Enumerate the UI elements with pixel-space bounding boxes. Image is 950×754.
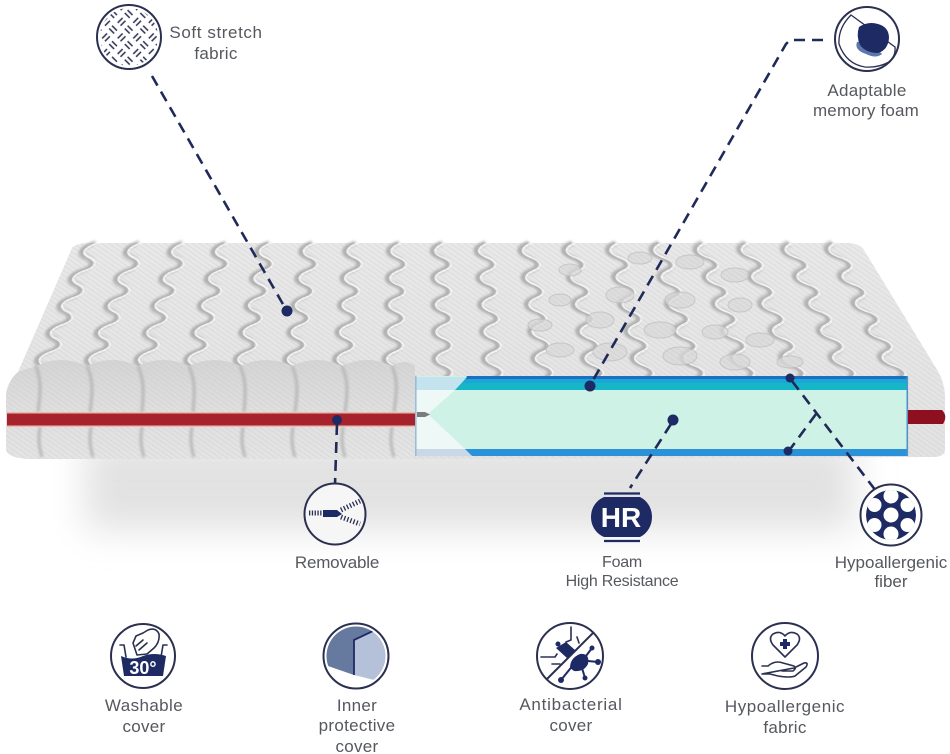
zipper slider xyxy=(417,412,430,417)
label: inner protective cover: Inner xyxy=(337,696,377,715)
label: foam high resistance: High Resistance xyxy=(566,573,679,590)
red zipper band xyxy=(7,412,417,427)
icon: washable 30 degrees: 30° xyxy=(129,658,157,678)
fabric texture xyxy=(6,243,945,459)
icon: HR foam: HR xyxy=(601,502,641,533)
memory foam bumps xyxy=(528,252,803,370)
faded left end xyxy=(415,390,465,449)
icon: hypoallergenic hand and heart xyxy=(752,623,818,689)
red zipper right end xyxy=(908,410,945,424)
label: soft stretch fabric: Soft stretch xyxy=(169,23,263,42)
leader: HR foam xyxy=(630,414,678,488)
icon: fiber xyxy=(860,484,922,546)
label: washable cover: cover xyxy=(122,717,166,736)
quilted seams xyxy=(29,243,908,378)
memory foam layer xyxy=(455,377,908,390)
label: hypoallergenic fiber: Hypoallergenic xyxy=(835,553,948,572)
label: washable cover: Washable xyxy=(105,696,183,715)
high resistance foam core xyxy=(415,376,908,456)
mattress top surface xyxy=(6,243,945,459)
label: adaptable memory foam: Adaptable xyxy=(827,81,907,100)
leader: memory foam xyxy=(584,40,823,392)
mattress front side xyxy=(6,360,415,459)
label: foam high resistance: Foam xyxy=(602,554,642,571)
label: soft stretch fabric: fabric xyxy=(194,44,238,63)
icon: washable 30 degrees xyxy=(111,624,175,688)
hypoallergenic fiber layer xyxy=(464,449,908,456)
front panel seams xyxy=(36,366,396,457)
floor shadow xyxy=(85,440,855,530)
label: hypoallergenic fiber: fiber xyxy=(874,572,908,591)
icon: HR foam xyxy=(591,494,652,541)
mattress xyxy=(6,243,945,459)
icon: memory foam hand xyxy=(835,7,899,71)
icon: inner protective cover xyxy=(320,620,390,688)
label: hypoallergenic fabric: Hypoallergenic xyxy=(725,697,845,716)
label: adaptable memory foam: memory foam xyxy=(813,101,919,120)
label: inner protective cover: protective xyxy=(319,716,395,735)
icon: zipper xyxy=(304,484,366,544)
label: antibacterial cover: cover xyxy=(549,716,593,735)
label: antibacterial cover: Antibacterial xyxy=(519,695,623,714)
icon: fabric weave xyxy=(97,5,161,69)
icon: antibacterial xyxy=(537,623,603,689)
leader: removable xyxy=(332,415,342,484)
foam cross-section xyxy=(415,376,908,456)
label: removable: Removable xyxy=(295,553,379,572)
leader: hypoallergenic fiber xyxy=(784,374,876,491)
label: hypoallergenic fabric: fabric xyxy=(763,718,807,737)
leader: soft stretch fabric xyxy=(152,76,292,316)
